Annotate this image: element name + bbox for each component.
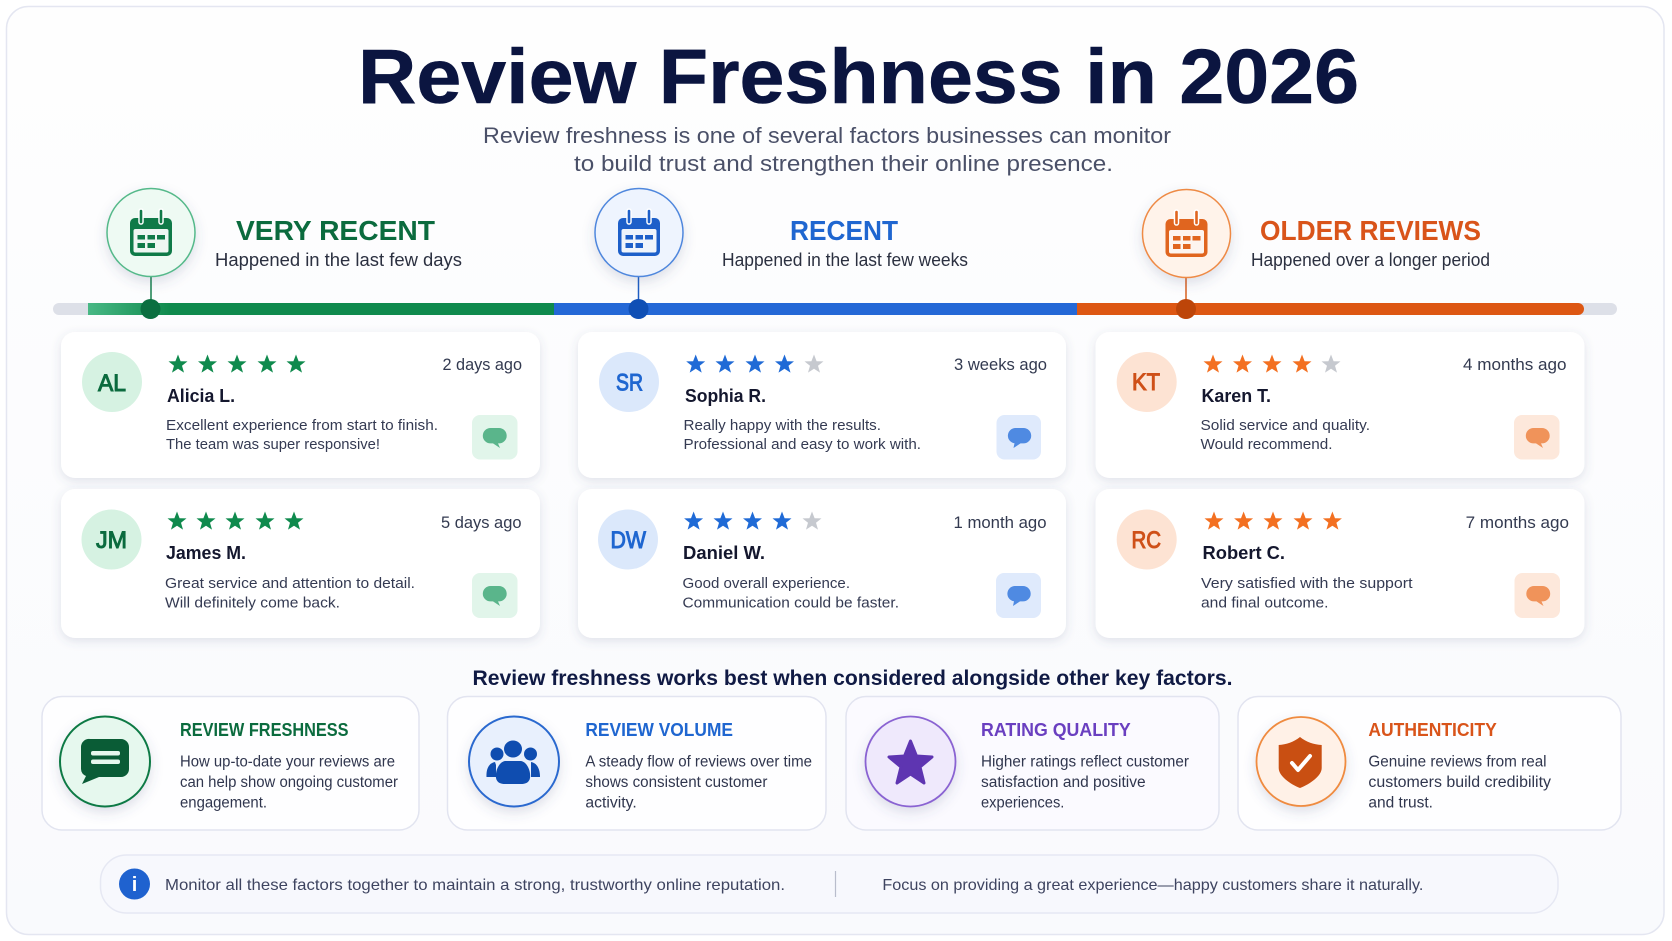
factor card: review volume <box>448 696 826 830</box>
time: 3 weeks ago <box>954 355 1047 374</box>
icon: orange calendar <box>1142 190 1230 278</box>
caption: very recent: Happened in the last few days <box>215 250 462 270</box>
avatar JM: JM <box>96 527 127 554</box>
avatar AL <box>82 352 142 412</box>
time: 2 days ago <box>442 355 522 374</box>
review text: Would recommend. <box>1200 436 1332 453</box>
heading: recent: RECENT <box>790 215 898 246</box>
stars: 4 orange, 1 grey <box>1204 354 1340 373</box>
review text <box>1200 417 1370 453</box>
description: Higher ratings reflect customer <box>981 754 1189 770</box>
description: Genuine reviews from real <box>1368 754 1547 770</box>
description: customers build credibility <box>1368 774 1551 791</box>
avatar KT <box>1117 352 1177 412</box>
description <box>585 754 812 812</box>
review text: Very satisfied with the support <box>1201 575 1413 592</box>
footer note bar <box>100 855 1558 913</box>
name: James M. <box>166 543 246 563</box>
review card: Daniel W. <box>578 489 1066 638</box>
description <box>981 754 1189 812</box>
review card: James M. <box>61 489 540 638</box>
review text: Really happy with the results. <box>684 417 881 434</box>
icon: star <box>866 716 956 806</box>
icon: comment <box>472 415 518 460</box>
name: Sophia R. <box>685 386 766 406</box>
review text: Will definitely come back. <box>165 594 340 612</box>
stars: 5 orange <box>1204 512 1342 530</box>
review text <box>682 575 899 612</box>
review card: Alicia L. <box>61 332 540 478</box>
icon: comment <box>1514 573 1560 618</box>
avatar DW: DW <box>610 527 646 554</box>
title: Review Freshness in 2026 <box>358 34 1359 120</box>
stage: recent <box>595 188 968 319</box>
name: Daniel W. <box>683 543 765 563</box>
avatar DW <box>598 510 658 570</box>
stem and dot: recent <box>628 277 648 319</box>
stars: 5 green <box>168 512 304 530</box>
icon: info: i <box>132 874 137 896</box>
icon: info <box>119 868 150 900</box>
review text: and final outcome. <box>1201 594 1328 612</box>
description: engagement. <box>180 794 267 812</box>
description: and trust. <box>1368 794 1433 812</box>
review text: Great service and attention to detail. <box>165 575 415 592</box>
description: experiences. <box>981 794 1064 812</box>
name: Alicia L. <box>167 386 235 406</box>
icon: green calendar <box>107 188 195 276</box>
name: Robert C. <box>1202 543 1285 563</box>
review text: Solid service and quality. <box>1200 417 1370 434</box>
icon: comment <box>996 573 1041 618</box>
timeline bar <box>53 303 1617 315</box>
stem and dot: older <box>1176 278 1196 319</box>
description: can help show ongoing customer <box>180 774 398 791</box>
review text <box>166 417 438 453</box>
icon: chat bubble <box>60 716 150 806</box>
avatar SR <box>599 352 659 412</box>
time: 7 months ago <box>1466 513 1569 532</box>
description: A steady flow of reviews over time <box>585 754 812 770</box>
name: Karen T. <box>1202 386 1271 406</box>
icon: shield <box>1256 717 1346 806</box>
description <box>180 754 398 812</box>
heading: REVIEW FRESHNESS <box>180 720 348 740</box>
subtitle: Review freshness is one of several factors businesses can monitor <box>483 123 1171 148</box>
caption: recent: Happened in the last few weeks <box>722 250 968 270</box>
icon: blue calendar <box>595 188 683 276</box>
stem and dot: very recent <box>140 277 160 319</box>
subtitle: to build trust and strengthen their online presence. <box>574 151 1113 176</box>
review text: Excellent experience from start to finish. <box>166 417 438 434</box>
factor card: review freshness <box>42 696 419 830</box>
stars: 5 green <box>168 354 306 373</box>
subtitle <box>483 123 1171 176</box>
factor card: rating quality <box>846 696 1219 830</box>
heading: REVIEW VOLUME <box>585 720 733 740</box>
review text <box>165 575 415 612</box>
avatar SR: SR <box>616 370 643 396</box>
icon: comment <box>472 573 518 618</box>
avatar KT: KT <box>1132 369 1160 396</box>
review card: Sophia R. <box>578 332 1066 478</box>
description <box>1368 754 1551 812</box>
heading: AUTHENTICITY <box>1368 720 1497 740</box>
heading: RATING QUALITY <box>981 720 1131 740</box>
icon: comment <box>1514 415 1560 460</box>
review card: Karen T. <box>1096 332 1584 478</box>
time: 1 month ago <box>954 513 1046 532</box>
section heading: Review freshness works best when considered alongside other key factors. <box>472 667 1232 690</box>
stage: very recent <box>107 188 462 319</box>
note: monitor: Monitor all these factors together to maintain a strong, trustworthy online reputation. <box>165 877 785 894</box>
caption: older reviews: Happened over a longer period <box>1251 250 1490 270</box>
avatar RC <box>1117 510 1177 570</box>
stars: 4 blue, 1 grey <box>684 512 822 530</box>
review text: Communication could be faster. <box>682 594 899 612</box>
description: shows consistent customer <box>585 774 767 791</box>
icon: people <box>469 716 559 806</box>
review text: The team was super responsive! <box>166 436 380 453</box>
review text <box>684 417 921 453</box>
icon: comment <box>996 415 1041 460</box>
factor card: authenticity <box>1238 696 1621 830</box>
review card: Robert C. <box>1096 489 1584 638</box>
note: focus: Focus on providing a great experience—happy customers share it naturally. <box>882 877 1423 894</box>
review text: Good overall experience. <box>682 575 850 592</box>
description: satisfaction and positive <box>981 774 1146 791</box>
review text <box>1201 575 1413 612</box>
stage: older reviews <box>1142 190 1490 319</box>
heading: very recent: VERY RECENT <box>236 215 435 246</box>
avatar AL: AL <box>98 370 126 397</box>
avatar RC: RC <box>1132 527 1161 554</box>
heading: older reviews: OLDER REVIEWS <box>1260 215 1481 246</box>
stars: 4 blue, 1 grey <box>686 354 824 373</box>
time: 5 days ago <box>441 513 522 532</box>
review text: Professional and easy to work with. <box>684 436 921 453</box>
avatar JM <box>82 510 142 570</box>
time: 4 months ago <box>1463 355 1566 374</box>
description: How up-to-date your reviews are <box>180 754 395 770</box>
description: activity. <box>585 794 637 812</box>
